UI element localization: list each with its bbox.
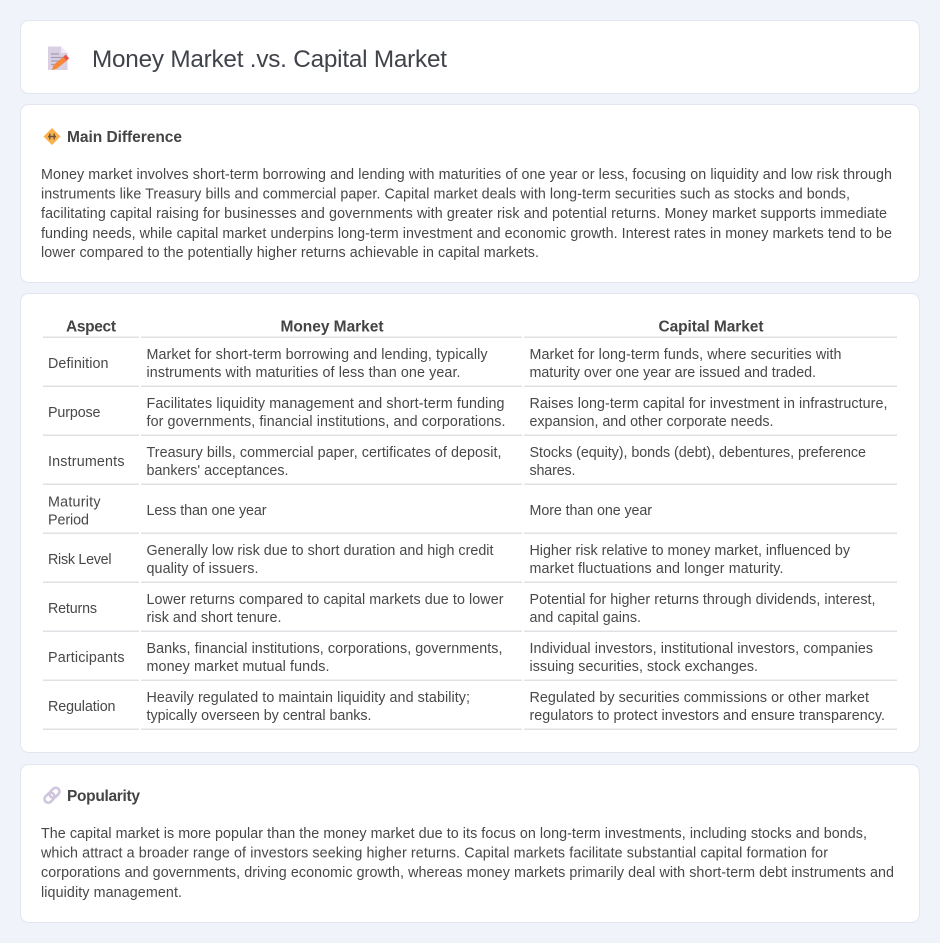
popularity paragraph [40,826,894,901]
row: participants: Banks, financial institutions, corporations, governments, [146,641,502,657]
row: purpose: Purpose [48,405,101,421]
popularity paragraph: liquidity management. [41,885,182,901]
row: maturity period: Less than one year [146,503,267,519]
main difference paragraph [41,167,892,261]
row: maturity period: Period [48,512,89,528]
main difference paragraph: Money market involves short-term borrowing and lending with maturities of one year or less, focusing on liquidity and low risk through [41,167,892,183]
icon: orange diamond [44,128,60,145]
popularity paragraph: corporations and governments, driving economic growth, whereas money markets primarily deal with short-term debt instruments and [41,865,894,881]
title text: Money Market .vs. Capital Market [92,46,447,73]
main difference paragraph: lower compared to the potentially higher returns achievable in capital markets. [41,245,539,261]
row: regulation: typically overseen by central banks. [146,708,372,724]
row: risk level: Generally low risk due to short duration and high credit [146,543,494,559]
main difference paragraph: instruments like Treasury bills and commercial paper. Capital market deals with long-term securities such as stocks and bonds, [41,186,850,202]
table header [43,318,897,338]
heading: main difference: Main Difference [67,129,182,146]
row: purpose: expansion, and other corporate needs. [530,414,774,430]
row: regulation: Regulated by securities commissions or other market [530,690,869,706]
row: risk level: quality of issuers. [146,561,258,577]
table header: Aspect [66,318,116,336]
row: participants: issuing securities, stock exchanges. [530,659,758,675]
row: maturity period: More than one year [530,503,652,519]
row: regulation: Regulation [48,699,116,715]
row: instruments [43,445,897,485]
row: risk level: Higher risk relative to money market, influenced by [530,543,851,559]
row: returns: Returns [48,601,97,617]
icon: chain link [43,786,61,804]
row: instruments: Stocks (equity), bonds (debt), debentures, preference [530,445,866,461]
row: purpose: Raises long-term capital for investment in infrastructure, [530,396,888,412]
row: instruments: Instruments [48,454,124,470]
panel: popularity [20,764,920,922]
popularity paragraph: which attract a broader range of investors seeking higher returns. Capital markets facilitate substantial capital formation for [40,846,828,862]
row: returns: Lower returns compared to capital markets due to lower [146,592,504,608]
row: regulation [43,690,897,730]
popularity paragraph: The capital market is more popular than the money market due to its focus on long-term investments, including stocks and bonds, [41,826,867,842]
row: definition: Market for short-term borrowing and lending, typically [146,347,488,363]
row: purpose: Facilitates liquidity management and short-term funding [146,396,505,412]
row: regulation: regulators to protect investors and ensure transparency. [530,708,885,724]
row: maturity period: Maturity [48,494,101,510]
row: risk level [43,543,897,583]
row: returns: risk and short tenure. [146,610,282,626]
row: participants: Participants [48,650,124,666]
row: purpose: for governments, financial institutions, and corporations. [146,414,506,430]
panel: comparison table [20,294,920,752]
row: definition: instruments with maturities of less than one year. [146,365,460,381]
row: returns: and capital gains. [530,610,641,626]
row: participants: money market mutual funds. [146,659,330,675]
row: purpose [43,396,897,436]
row: instruments: Treasury bills, commercial paper, certificates of deposit, [146,445,502,461]
table header: Money Market [280,318,384,336]
row: risk level: Risk Level [48,552,112,568]
icon: document with pencil [48,46,69,70]
panel: title [20,20,920,94]
main difference paragraph: funding needs, while capital market underpins long-term investment and economic growth. Interest rates in money markets tend to be [41,226,892,242]
table header: Capital Market [658,318,764,336]
row: returns: Potential for higher returns through dividends, interest, [530,592,876,608]
row: returns [43,592,897,632]
row: definition: Market for long-term funds, where securities with [530,347,842,363]
row: definition [43,347,897,387]
row: instruments: bankers' acceptances. [146,463,288,479]
main difference paragraph: facilitating capital raising for businesses and governments with greater risk and potential returns. Money market supports immediate [41,206,887,222]
row: participants: Individual investors, institutional investors, companies [530,641,873,657]
row: risk level: market fluctuations and longer maturity. [530,561,784,577]
row: participants [43,641,897,681]
panel: main difference [20,104,920,282]
row: regulation: Heavily regulated to maintain liquidity and stability; [146,690,470,706]
heading: popularity: Popularity [67,788,140,805]
row: definition: Definition [48,356,109,372]
row: maturity period [43,494,897,534]
row: instruments: shares. [530,463,576,479]
row: definition: maturity over one year are issued and traded. [530,365,816,381]
